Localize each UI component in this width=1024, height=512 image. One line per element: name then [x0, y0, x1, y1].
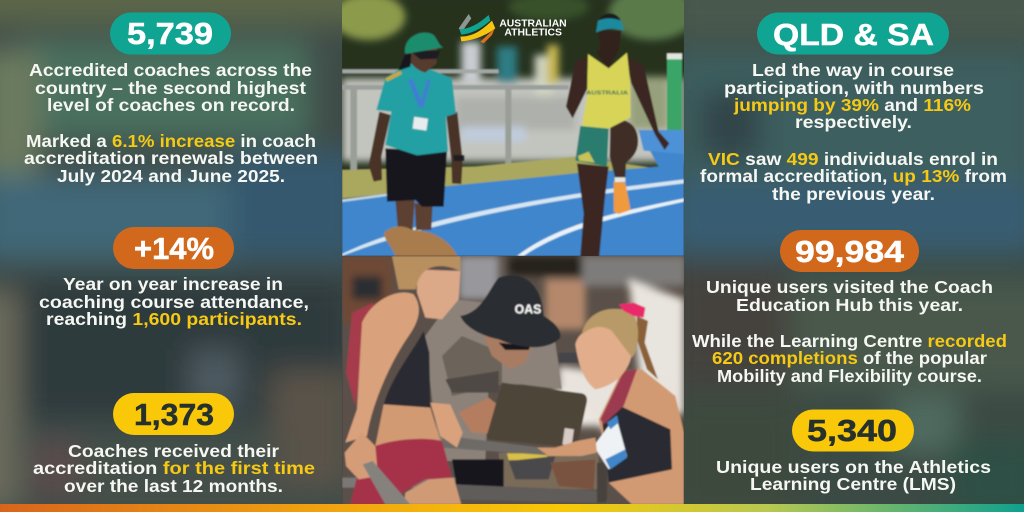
text: learning centre description: Unique users on the Athletics	[716, 457, 991, 477]
text: accredited coaches description: Accredited coaches across the	[29, 60, 312, 80]
text: first time description: Coaches received their	[68, 441, 279, 461]
stat: QLD and SA course participation	[700, 12, 1007, 204]
text: QLD and SA description: Led the way in course	[752, 60, 954, 80]
text: QLD and SA description: respectively.	[795, 112, 912, 132]
athlete: right arm	[627, 57, 669, 150]
text: learning centre description	[716, 457, 991, 494]
pill: 5,739	[110, 12, 231, 54]
official: green cap	[405, 33, 443, 54]
text: coach education hub description: Education Hub this year.	[736, 295, 963, 315]
text: accredited coaches description	[24, 60, 318, 186]
official: arms	[369, 112, 391, 182]
text: first time description	[33, 441, 315, 496]
text: first time description: over the last 12 months.	[64, 476, 283, 496]
fence rails	[342, 69, 499, 73]
athlete: neck and head	[596, 31, 621, 68]
official: shorts	[385, 148, 447, 207]
left athlete: crop top and shoulder	[346, 303, 374, 406]
left athlete: arm	[345, 292, 419, 443]
photo: official and athlete on blue track	[332, 0, 695, 256]
athlete: yellow singlet	[582, 53, 631, 129]
text: coach education hub description: Mobility and Flexibility course.	[717, 366, 982, 386]
right athlete: dark top	[602, 406, 672, 483]
pill: 99,984	[780, 230, 919, 272]
left blurred background	[0, 0, 370, 512]
photo: official and athlete on blue track: AUSTRALIA	[586, 90, 628, 96]
right athlete: hand under tablet	[537, 438, 597, 456]
athlete: raised leg	[610, 120, 638, 178]
logo: Australian Athletics	[459, 14, 567, 43]
athlete: left arm with fist	[565, 57, 588, 118]
blurred tree, fence, grass and spectators	[332, 0, 695, 162]
athlete: teal visor	[596, 18, 624, 33]
text: QLD and SA description: participation, with numbers	[724, 78, 984, 98]
pill: +14%	[113, 227, 234, 269]
text: QLD and SA description: the previous year.	[772, 184, 935, 204]
blurred crowd and stand	[342, 256, 685, 436]
official: head	[410, 43, 437, 73]
text: first time description: accreditation for the first time	[33, 458, 315, 478]
rails	[442, 438, 590, 458]
athlete: standing leg	[577, 163, 609, 256]
left athlete: shorts	[350, 439, 452, 504]
left athlete: hand on rail	[345, 433, 378, 479]
pill: 5,739: 5,739	[127, 17, 213, 51]
right athlete: bib	[594, 416, 627, 469]
official: teal shirt	[376, 63, 456, 155]
text: coach education hub description	[692, 277, 1007, 386]
lying person below the rail	[499, 453, 599, 489]
pill: 5,340	[792, 410, 914, 452]
bottom gradient bar	[0, 504, 1024, 512]
right athlete: braid	[637, 316, 658, 379]
tablet	[487, 383, 587, 448]
text: accredited coaches description: country – the second highest	[35, 78, 306, 98]
stat: 99,984 coach education hub users	[692, 230, 1007, 386]
pill: 5,340: 5,340	[807, 414, 897, 448]
right blurred background	[670, 0, 1024, 512]
stat: 5,739 accredited coaches	[24, 12, 318, 186]
text: QLD and SA description: jumping by 39% and 116%	[733, 95, 971, 115]
coach: bucket hat	[460, 275, 561, 347]
left athlete: belly	[375, 404, 440, 446]
photo: coach showing tablet to two athletes: OAS	[515, 301, 541, 316]
text: QLD and SA description: VIC saw 499 individuals enrol in	[708, 149, 998, 169]
coach: forearm and hand	[458, 397, 497, 434]
stat: +14% course attendance	[39, 227, 309, 329]
logo: Australian Athletics: AUSTRALIAN	[499, 19, 567, 30]
grass	[342, 157, 655, 198]
text: learning centre description: Learning Centre (LMS)	[750, 474, 956, 494]
athlete: orange shoe	[614, 182, 631, 214]
pill: +14%: +14%	[134, 232, 214, 266]
text: accredited coaches description: July 2024 and June 2025.	[57, 166, 285, 186]
pill: QLD & SA	[757, 12, 949, 54]
pill: 1,373: 1,373	[134, 398, 214, 432]
hair bun of athlete below	[384, 226, 457, 256]
text: QLD and SA description	[700, 60, 1007, 204]
text: attendance description	[39, 274, 309, 329]
logo: Australian Athletics: ATHLETICS	[504, 28, 562, 39]
left athlete: forearm and hand on waist	[430, 403, 463, 448]
coach: face	[484, 336, 532, 369]
right athlete: skin	[599, 369, 684, 504]
track	[342, 150, 684, 256]
text: accredited coaches description: Marked a 6.1% increase in coach	[26, 131, 316, 151]
official: legs	[395, 200, 433, 230]
text: attendance description: coaching course attendance,	[39, 292, 309, 312]
photo: coach showing tablet to two athletes	[342, 256, 685, 512]
panel: right statistics	[670, 0, 1024, 512]
pill: 99,984: 99,984	[795, 235, 904, 269]
coach: grey shirt	[425, 299, 562, 461]
left athlete: head and hair	[417, 269, 460, 319]
text: coach education hub description: Unique users visited the Coach	[706, 277, 993, 297]
stat: 1,373 first time accreditations	[33, 393, 315, 496]
pink hair scrunchie	[619, 303, 645, 318]
right athlete: head	[575, 326, 633, 389]
panel: left statistics	[0, 0, 370, 512]
pill: QLD & SA: QLD & SA	[773, 18, 934, 52]
official: lanyard	[408, 79, 431, 107]
text: coach education hub description: While the Learning Centre recorded	[692, 331, 1007, 351]
text: attendance description: reaching 1,600 participants.	[46, 309, 302, 329]
text: accredited coaches description: accreditation renewals between	[24, 148, 318, 168]
text: QLD and SA description: formal accreditation, up 13% from	[700, 166, 1007, 186]
athlete: green shorts	[575, 126, 609, 167]
pill: 1,373	[113, 393, 234, 435]
text: attendance description: Year on year increase in	[63, 274, 283, 294]
stat: 5,340 learning centre users	[716, 410, 991, 494]
text: coach education hub description: 620 completions of the popular	[712, 348, 987, 368]
text: accredited coaches description: level of coaches on record.	[47, 95, 295, 115]
